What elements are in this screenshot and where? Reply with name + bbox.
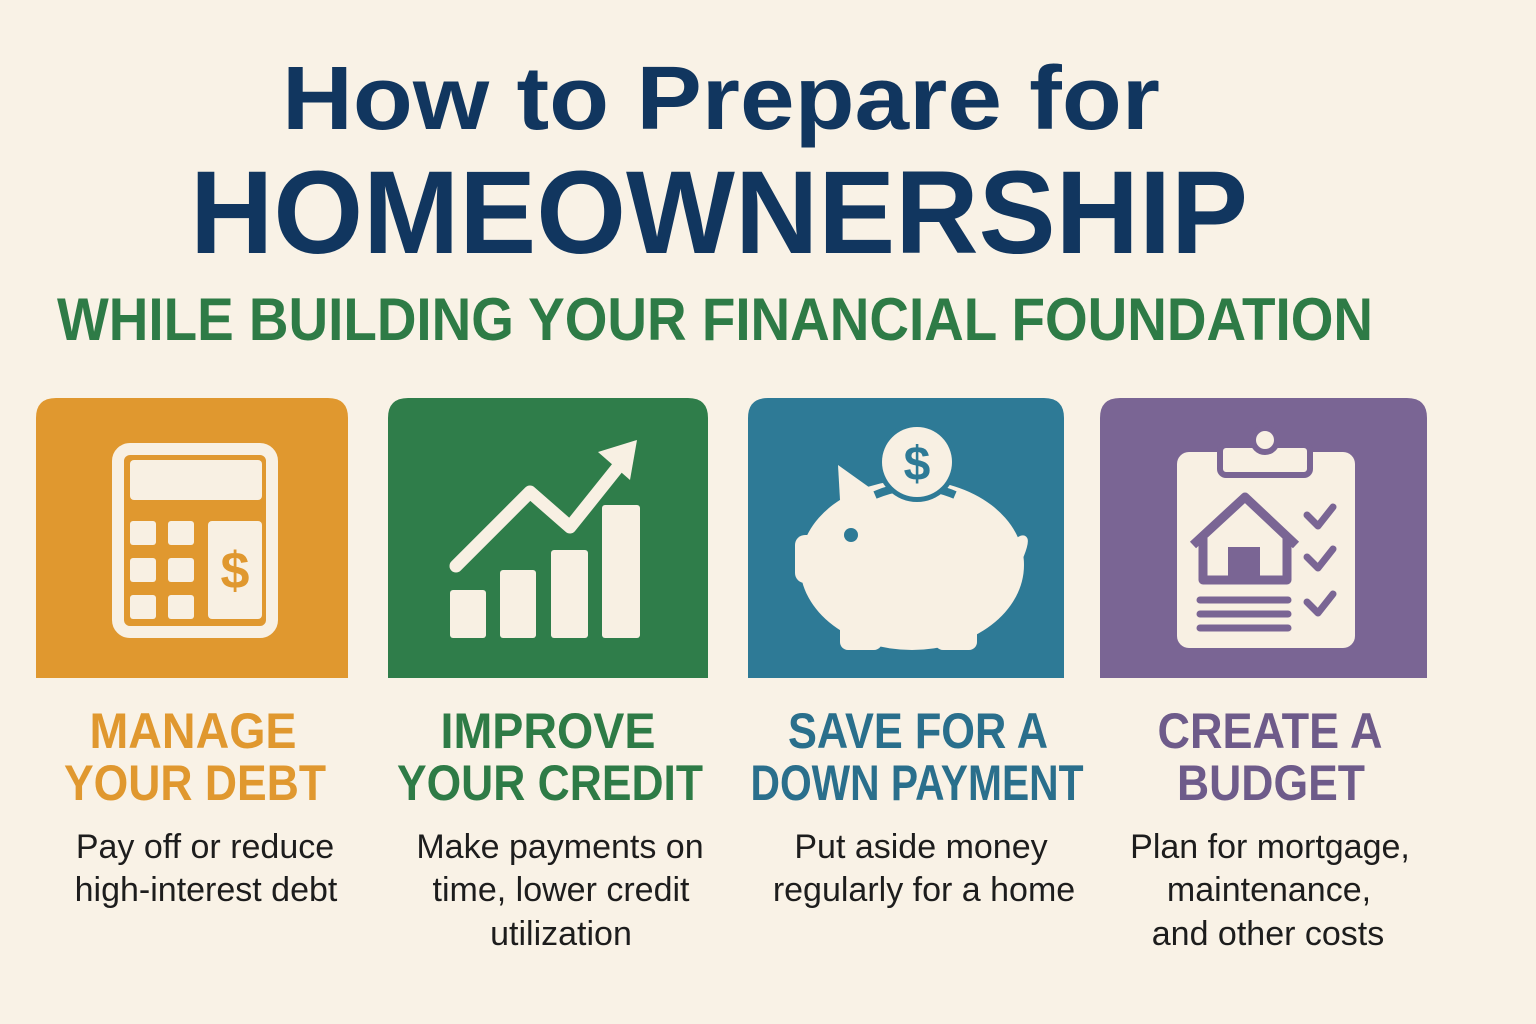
panel: manage debt bbox=[36, 398, 348, 909]
icon: calculator bbox=[118, 449, 272, 632]
heading: IMPROVE bbox=[440, 703, 656, 759]
title: How to Prepare for bbox=[282, 49, 1160, 149]
title bbox=[190, 49, 1248, 279]
heading: SAVE FOR A bbox=[788, 703, 1048, 759]
description: utilization bbox=[490, 915, 632, 953]
icon: piggy bank bbox=[795, 422, 1024, 650]
heading: YOUR DEBT bbox=[64, 755, 326, 811]
icon: bar chart with arrow bbox=[450, 440, 640, 638]
description: Pay off or reduce bbox=[76, 828, 334, 866]
icon: clipboard with house bbox=[1177, 428, 1355, 648]
title: HOMEOWNERSHIP bbox=[190, 147, 1248, 279]
description: Put aside money bbox=[794, 828, 1048, 866]
panel: create budget bbox=[1100, 398, 1427, 953]
description: regularly for a home bbox=[773, 871, 1075, 909]
heading: MANAGE bbox=[90, 703, 296, 759]
subtitle: WHILE BUILDING YOUR FINANCIAL FOUNDATION bbox=[57, 286, 1373, 353]
panel: improve credit bbox=[388, 398, 708, 953]
heading: YOUR CREDIT bbox=[397, 755, 703, 811]
description: maintenance, bbox=[1167, 871, 1371, 909]
panel: save for down payment bbox=[748, 398, 1084, 909]
icon: piggy bank: $ bbox=[904, 438, 931, 491]
heading: CREATE A bbox=[1158, 703, 1382, 759]
heading: BUDGET bbox=[1177, 755, 1365, 811]
description: Make payments on bbox=[416, 828, 704, 866]
description: high-interest debt bbox=[75, 871, 338, 909]
description: Plan for mortgage, bbox=[1130, 828, 1410, 866]
description: time, lower credit bbox=[433, 871, 690, 909]
description: and other costs bbox=[1152, 915, 1384, 953]
icon: calculator: $ bbox=[221, 542, 250, 600]
heading: DOWN PAYMENT bbox=[750, 755, 1084, 811]
